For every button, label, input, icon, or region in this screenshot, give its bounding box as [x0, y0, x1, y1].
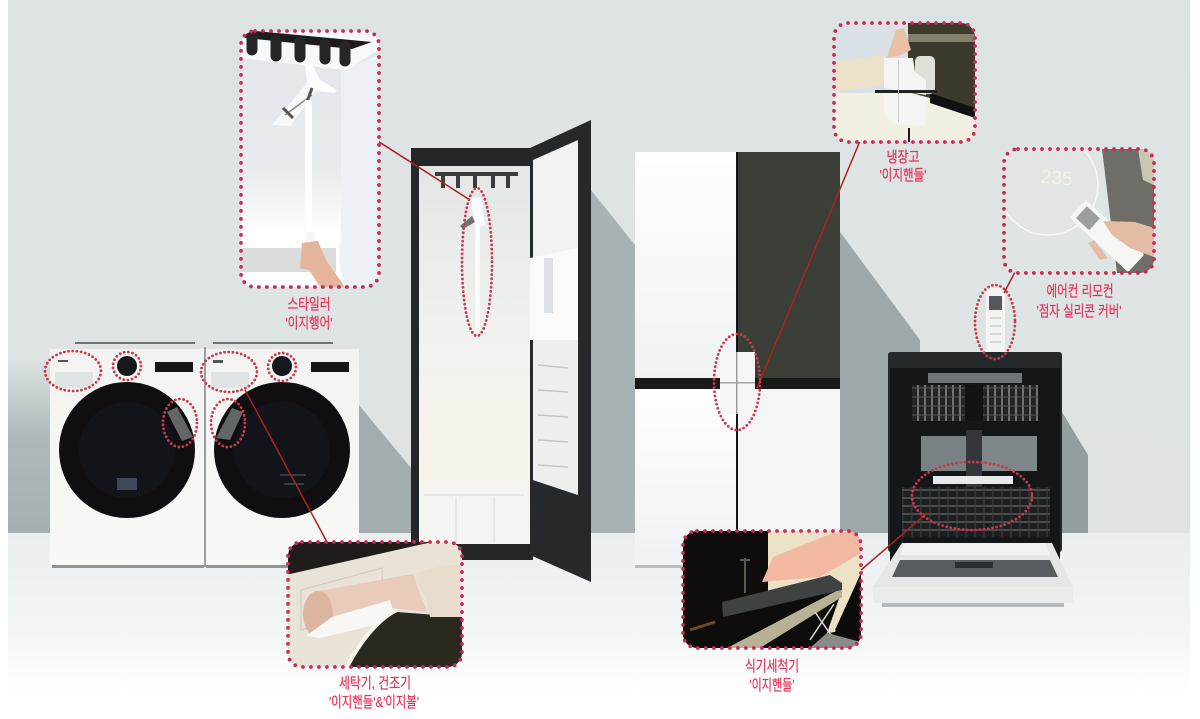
appliance: washing machine	[50, 342, 204, 568]
label: dishwasher: '이지핸들'	[750, 677, 795, 694]
appliance: styler	[411, 120, 591, 582]
inset photo: refrigerator easy handle	[834, 23, 975, 142]
inset photo: washer and dryer easy handle and ball	[288, 542, 462, 667]
inset photo: styler easy hanger	[241, 30, 379, 287]
label: styler: '이지행어'	[286, 315, 333, 332]
label: washer and dryer: '이지핸들'&'이지볼'	[329, 694, 419, 711]
label: air conditioner remote: 에어컨 리모컨	[1046, 283, 1114, 300]
connector lines	[245, 140, 1015, 570]
label: washer and dryer: 세탁기, 건조기	[339, 675, 411, 692]
inset photo: remote with braille cover: 235	[1040, 167, 1073, 190]
inset photo: remote with braille cover	[998, 135, 1154, 273]
appliance: dishwasher	[873, 352, 1073, 607]
appliance: dryer	[204, 342, 359, 568]
appliance: refrigerator	[635, 152, 840, 568]
label: dishwasher: 식기세척기	[745, 658, 799, 675]
label: refrigerator: 냉장고	[886, 149, 920, 166]
label: styler: 스타일러	[288, 296, 330, 313]
appliance: air conditioner remote	[986, 288, 1005, 356]
highlight markers on appliances	[45, 188, 1032, 530]
inset photo: dishwasher easy handle	[683, 531, 861, 648]
label: refrigerator: '이지핸들'	[880, 167, 927, 184]
label: air conditioner remote: '점자 실리콘 커버'	[1036, 303, 1122, 320]
